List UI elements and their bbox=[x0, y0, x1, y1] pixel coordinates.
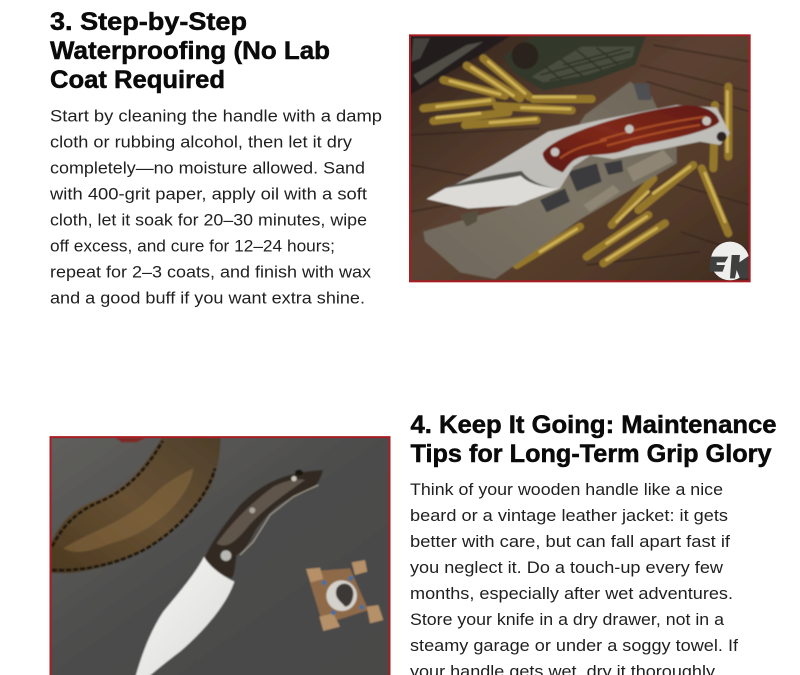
heading: step 3: Waterproofing (No Lab bbox=[50, 37, 330, 65]
text block: step 3 instructions: off excess, and cure for 12–24 hours; bbox=[50, 238, 335, 256]
text block: step 3 instructions: with 400-grit paper, apply oil with a soft bbox=[49, 186, 367, 204]
text block: step 4 maintenance tips: beard or a vintage leather jacket: it gets bbox=[410, 507, 728, 525]
heading: step 3 bbox=[50, 8, 330, 94]
text block: step 3 instructions: repeat for 2–3 coats, and finish with wax bbox=[50, 264, 372, 282]
text block: step 4 maintenance tips: Store your knife in a dry drawer, not in a bbox=[410, 611, 725, 629]
heading: step 3: 3. Step-by-Step bbox=[50, 8, 247, 36]
text block: step 4 maintenance tips: you neglect it. Do a touch-up every few bbox=[410, 559, 723, 577]
heading: step 3: Coat Required bbox=[50, 66, 225, 94]
logo: EK gear mark bbox=[709, 242, 750, 280]
heading: step 4 bbox=[410, 411, 777, 468]
text block: step 3 instructions: cloth or rubbing alcohol, then let it dry bbox=[50, 134, 353, 152]
text block: step 4 maintenance tips: better with care, but can fall apart fast if bbox=[410, 533, 730, 551]
heading: step 4: Tips for Long-Term Grip Glory bbox=[410, 440, 772, 468]
text block: step 3 instructions: and a good buff if you want extra shine. bbox=[50, 290, 365, 308]
text block: step 4 maintenance tips: Think of your wooden handle like a nice bbox=[410, 481, 723, 499]
text block: step 3 instructions: Start by cleaning the handle with a damp bbox=[50, 108, 382, 126]
photo: folding knife with leather sheath and skull spinner bbox=[47, 433, 393, 675]
text block: step 3 instructions bbox=[49, 108, 382, 308]
text block: step 4 maintenance tips: steamy garage or under a soggy towel. If bbox=[410, 637, 738, 655]
text block: step 4 maintenance tips: months, especially after wet adventures. bbox=[410, 585, 733, 603]
photo: Buck knife with red wood handle on ammunition bbox=[407, 32, 753, 285]
heading: step 4: 4. Keep It Going: Maintenance bbox=[410, 411, 777, 439]
text block: step 3 instructions: cloth, let it soak for 20–30 minutes, wipe bbox=[50, 212, 367, 230]
text block: step 3 instructions: completely—no moisture allowed. Sand bbox=[50, 160, 365, 178]
text block: step 4 maintenance tips bbox=[410, 481, 738, 675]
